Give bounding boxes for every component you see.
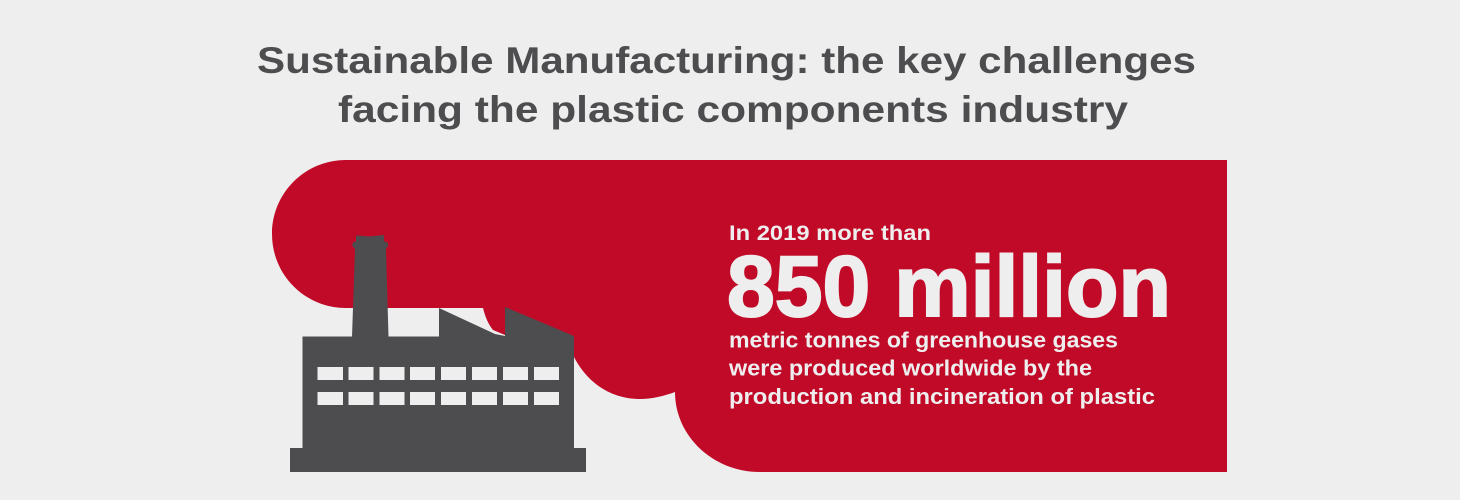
icon: factory	[290, 235, 586, 472]
factory windows	[318, 367, 559, 405]
title: Sustainable Manufacturing: the key challenges	[257, 40, 1196, 81]
factory silhouette	[290, 235, 586, 472]
description: production and incineration of plastic	[729, 384, 1155, 409]
intro line: In 2019 more than	[729, 222, 931, 245]
big number: 850 million	[727, 239, 1171, 335]
smoke cloud panel	[272, 160, 1227, 472]
statistic text block	[727, 222, 1171, 409]
description	[728, 328, 1155, 409]
title	[257, 40, 1196, 130]
title: facing the plastic components industry	[338, 89, 1128, 130]
description: metric tonnes of greenhouse gases	[729, 328, 1118, 352]
description: were produced worldwide by the	[728, 356, 1092, 381]
